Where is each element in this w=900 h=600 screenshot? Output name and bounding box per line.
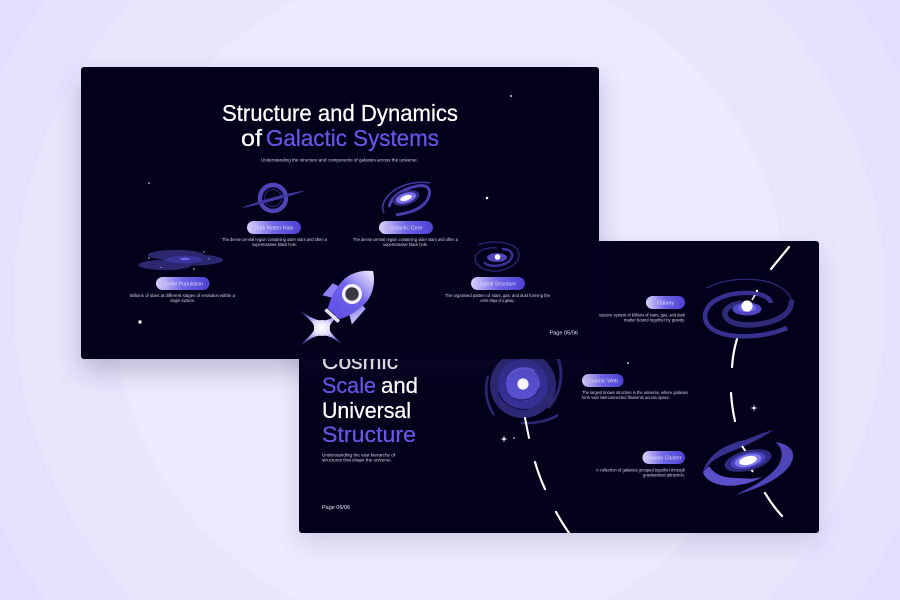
title: Cosmic Scale and Universal Structure [322,349,418,447]
label: Cosmic Web [582,374,688,400]
label: Dark Matter Halo [222,221,328,247]
label: Stellar Population [130,277,236,303]
label: Galactic Core: supermassive black hole. [383,242,428,247]
orbit dashes [535,247,789,533]
title: Cosmic Scale and Universal Structure: Universal [322,398,411,423]
icon: whirlpool galaxy [486,352,561,438]
label: Spiral Structure: The organised pattern of stars, gas, and dust forming the [445,293,551,298]
title: Structure and Dynamics of Galactic Systems: Structure and Dynamics [222,100,458,126]
label: Dark Matter Halo: The dense central region containing older stars and often a [222,237,328,242]
label: Stellar Population: Stellar Population [163,282,203,288]
page number: Page 06/06 [322,505,350,511]
subtitle [322,452,396,462]
label: Galaxy: matter bound together by gravity. [624,318,685,322]
label: Galaxy Cluster: A collection of galaxies grouped together through [596,468,686,472]
label: Stellar Population: Billions of stars at different stages of evolution within a [130,293,236,298]
label: Cosmic Web: The largest known structure in the universe, where galaxies [582,390,688,395]
subtitle: structures that shape the universe. [322,458,392,462]
title: Cosmic Scale and Universal Structure: and [381,373,418,398]
label: Dark Matter Halo: supermassive black hole. [252,242,297,247]
icon: barred galaxy cluster [703,430,793,495]
label: Spiral Structure: Spiral Structure [480,282,516,288]
label: Dark Matter Halo: Dark Matter Halo [254,226,294,232]
label: Galaxy Cluster: Galaxy Cluster [646,456,682,462]
title: Structure and Dynamics of Galactic Systems: Galactic Systems [266,125,439,151]
stars [138,95,512,323]
subtitle: Understanding the vast hierarchy of [322,452,396,458]
label: Galaxy Cluster: gravitational attraction. [643,472,685,478]
title: Cosmic Scale and Universal Structure: Scale [322,373,376,398]
icon: stellar population [138,250,223,270]
label: Galaxy: Galaxy [657,300,674,306]
label: Cosmic Web: Cosmic Web [588,378,618,384]
label: Galactic Core: Galactic Core [390,226,423,232]
label: Galaxy [594,296,686,322]
label: Galaxy: A massive system of billions of stars, gas, and dark [594,312,686,318]
panel: slide 06 cosmic scale [299,241,819,533]
icon: rocket exhaust sparkle [298,308,345,348]
icon: galactic core [383,182,430,215]
title: Structure and Dynamics of Galactic Systems [222,100,458,151]
title: Cosmic Scale and Universal Structure: Cosmic [322,349,398,374]
label: Galactic Core: The dense central region containing older stars and often a [353,237,459,242]
label: Galactic Core [353,221,459,247]
title: Cosmic Scale and Universal Structure: Structure [322,422,416,447]
stars [500,362,758,442]
label: Stellar Population: single system. [170,298,195,303]
label: Spiral Structure: entire shape of a galaxy. [480,298,514,303]
label: Galaxy Cluster [596,451,686,478]
page number: Page 05/06 [550,330,578,336]
icon: dark matter halo [243,185,304,211]
icon: spiral structure [475,242,519,271]
title: Structure and Dynamics of Galactic Systems: of [241,125,263,151]
subtitle: Understanding the structure and components of galaxies across the universe. [261,158,418,162]
label: Spiral Structure [445,277,551,303]
label: Cosmic Web: form vast interconnected filaments across space. [582,395,670,400]
icon: galaxy spiral top right [705,279,792,336]
panel: slide 05 galactic systems [81,67,599,359]
